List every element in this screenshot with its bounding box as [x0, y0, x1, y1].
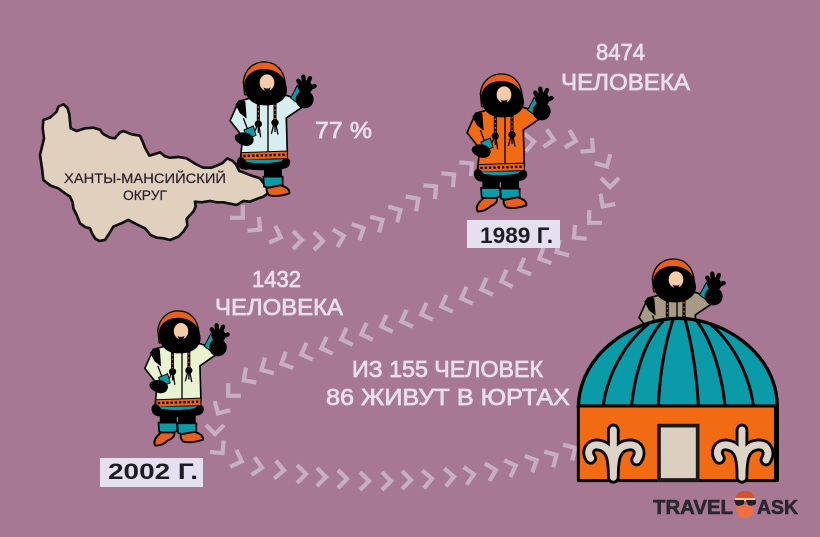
- map label: ОКРУГ: [123, 187, 167, 203]
- icon: bearded head: [734, 491, 756, 518]
- arrow: chevrons from 2002 to yurt: [206, 401, 580, 490]
- map label: [64, 169, 226, 203]
- map label: ХАНТЫ-МАНСИЙСКИЙ: [64, 169, 226, 186]
- ornament right: [717, 430, 768, 477]
- figure: person in orange coat: [467, 74, 552, 211]
- text: 1432 people: 1432: [252, 266, 301, 292]
- text: yurt statistic: [326, 356, 570, 410]
- year label: 2002: 2002 Г.: [108, 459, 198, 484]
- figure: person in yurt: [639, 259, 724, 367]
- ornament left: [589, 430, 639, 477]
- yurt: [578, 318, 779, 481]
- figure: person in pale green coat: [145, 311, 228, 446]
- year label: 1989: [467, 220, 560, 248]
- arrow: chevrons from 1989 to 2002: [222, 240, 569, 402]
- logo: TravelAsk: ASK: [757, 497, 799, 519]
- year label: 1989: 1989 Г.: [480, 223, 553, 248]
- text: yurt statistic: 86 ЖИВУТ В ЮРТАХ: [326, 384, 570, 410]
- year label: 2002: [100, 458, 203, 487]
- text: yurt statistic: ИЗ 155 ЧЕЛОВЕК: [352, 356, 544, 382]
- text: 77 percent: 77 %: [315, 117, 372, 143]
- map: Khanty-Mansi okrug: [40, 104, 270, 241]
- logo: TravelAsk: TRAVEL: [653, 497, 733, 519]
- text: 8474 people: ЧЕЛОВЕКА: [561, 69, 691, 95]
- text: 8474 people: 8474: [596, 39, 645, 65]
- text: 1432 people: ЧЕЛОВЕКА: [215, 294, 344, 320]
- text: 1432 people: [215, 266, 344, 320]
- text: 8474 people: [561, 39, 691, 95]
- figure: person in light blue coat: [230, 62, 315, 196]
- arrow: chevrons from map to 1989: [230, 129, 619, 250]
- logo: TravelAsk: [653, 491, 799, 519]
